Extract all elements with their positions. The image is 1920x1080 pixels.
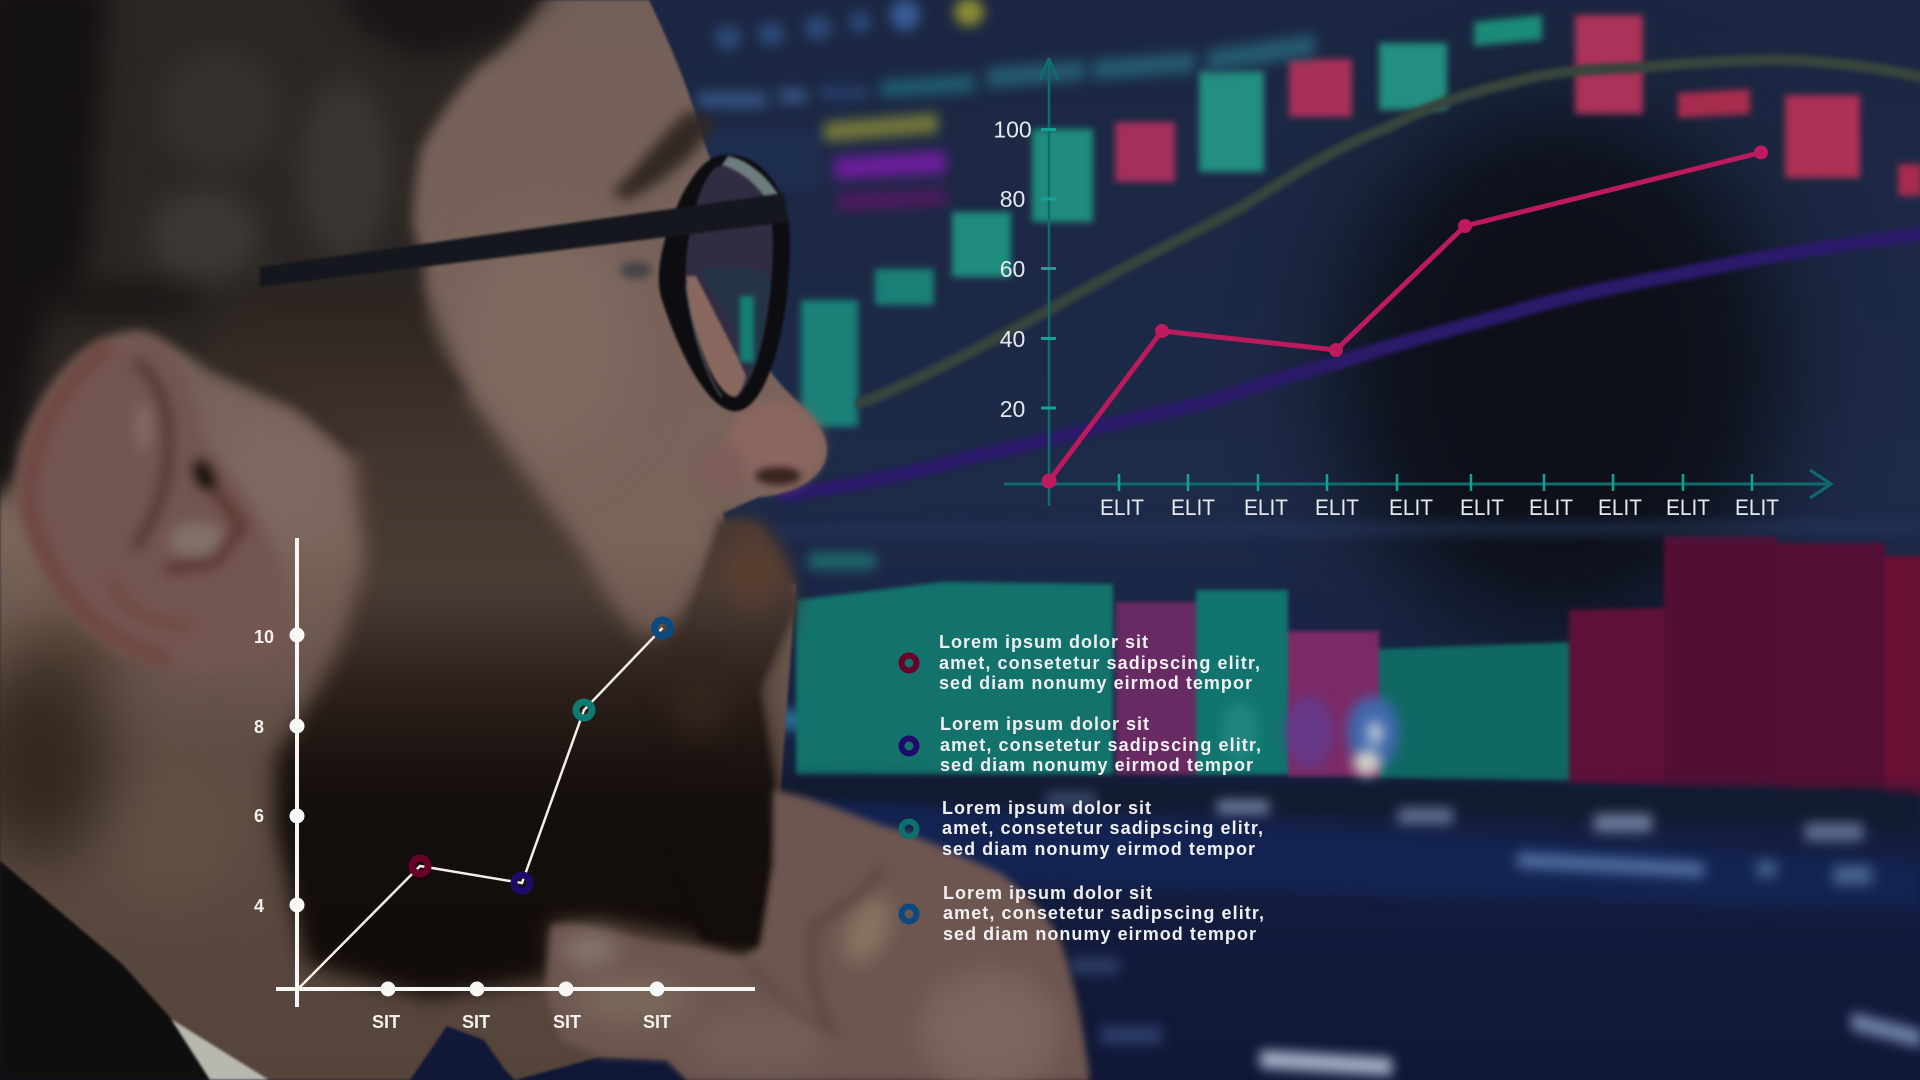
x axis labels: ELIT — [1529, 495, 1573, 520]
glasses — [260, 155, 790, 411]
reflection in lens — [700, 266, 778, 395]
legend item 3: Lorem ipsum dolor sit — [942, 798, 1151, 818]
y axis labels — [254, 627, 274, 916]
legend item 1: Lorem ipsum dolor sit — [939, 632, 1148, 652]
data points — [1042, 146, 1768, 488]
beard — [200, 290, 796, 998]
x axis labels: ELIT — [1666, 495, 1710, 520]
skin tone modelling — [0, 230, 625, 900]
x axis labels: ELIT — [1244, 495, 1288, 520]
y axis labels: 6 — [254, 806, 264, 826]
data line — [298, 628, 662, 989]
y axis labels: 60 — [1000, 256, 1025, 282]
legend item 3: amet, consetetur sadipscing elitr, — [942, 818, 1263, 838]
y axis labels: 100 — [993, 116, 1032, 142]
hand creases — [745, 867, 883, 1035]
x axis labels: ELIT — [1735, 495, 1779, 520]
y axis ticks — [1041, 130, 1056, 408]
nostril — [755, 467, 801, 485]
legend item 4: sed diam nonumy eirmod tempor — [943, 924, 1256, 944]
hair shading — [0, 0, 560, 500]
x axis labels: SIT — [553, 1012, 581, 1032]
legend item 4: amet, consetetur sadipscing elitr, — [943, 903, 1264, 923]
x axis labels: ELIT — [1460, 495, 1504, 520]
x axis labels: SIT — [462, 1012, 490, 1032]
hand at chin — [545, 790, 1090, 1080]
y axis labels — [993, 116, 1032, 422]
hand shading — [570, 970, 1060, 1080]
y axis labels: 20 — [1000, 396, 1025, 422]
inner rim glint — [686, 285, 722, 397]
temple arm — [260, 193, 788, 287]
lens rim — [659, 155, 790, 411]
eye corner — [620, 261, 652, 279]
x axis labels: SIT — [372, 1012, 400, 1032]
y axis labels: 80 — [1000, 186, 1025, 212]
legend item 2: amet, consetetur sadipscing elitr, — [940, 735, 1261, 755]
legend — [902, 632, 1264, 944]
data rings — [412, 620, 670, 891]
beard front edge — [660, 520, 796, 947]
x axis labels — [1100, 495, 1779, 520]
lens interior — [661, 158, 788, 407]
photo: man in profile with glasses — [0, 0, 1090, 1080]
blurred indicator lines — [783, 60, 1920, 496]
face and neck skin — [0, 0, 1089, 1080]
chart: top right line chart — [993, 58, 1831, 520]
nose bridge seen through lens — [686, 276, 746, 402]
screen bands and labels — [780, 520, 1920, 1076]
ear — [18, 337, 290, 672]
y axis labels: 8 — [254, 717, 264, 737]
ear interior — [30, 345, 242, 660]
legend item 4 — [902, 883, 1264, 944]
legend item 2: sed diam nonumy eirmod tempor — [940, 755, 1253, 775]
shirt collar — [171, 1019, 269, 1080]
x axis labels: SIT — [643, 1012, 671, 1032]
y axis — [1040, 58, 1058, 506]
y axis labels: 10 — [254, 627, 274, 647]
y axis labels: 40 — [1000, 326, 1025, 352]
blurred volume bars — [796, 536, 1920, 796]
nose — [698, 401, 823, 496]
hair — [0, 0, 552, 520]
legend item 3: sed diam nonumy eirmod tempor — [942, 839, 1255, 859]
y axis labels: 4 — [254, 896, 264, 916]
beard colour variation — [670, 532, 778, 735]
x axis labels — [372, 1012, 671, 1032]
eyebrow — [612, 110, 715, 200]
x axis — [1004, 470, 1831, 498]
y axis dots — [290, 628, 304, 912]
x axis ticks — [1119, 474, 1752, 491]
legend item 1 — [902, 632, 1260, 693]
legend item 1: sed diam nonumy eirmod tempor — [939, 673, 1252, 693]
x axis dots — [380, 982, 664, 996]
rim highlight — [722, 156, 785, 208]
legend item 4: Lorem ipsum dolor sit — [943, 883, 1152, 903]
x axis labels: ELIT — [1389, 495, 1433, 520]
teal reflection — [740, 296, 754, 362]
legend item 3 — [902, 798, 1263, 859]
axes — [276, 538, 755, 1007]
x axis labels: ELIT — [1171, 495, 1215, 520]
legend item 2: Lorem ipsum dolor sit — [940, 714, 1149, 734]
legend item 2 — [902, 714, 1261, 775]
knuckle and finger highlights — [562, 889, 900, 971]
jacket — [0, 861, 210, 1080]
blurred ticker text — [660, 0, 1315, 730]
dark reflection on screen — [1335, 105, 1785, 635]
x axis labels: ELIT — [1598, 495, 1642, 520]
chart: lower left line chart — [254, 538, 755, 1032]
blurred candlesticks — [801, 15, 1920, 427]
x axis labels: ELIT — [1100, 495, 1144, 520]
legend item 1: amet, consetetur sadipscing elitr, — [939, 653, 1260, 673]
x axis labels: ELIT — [1315, 495, 1359, 520]
data line — [1049, 152, 1761, 481]
